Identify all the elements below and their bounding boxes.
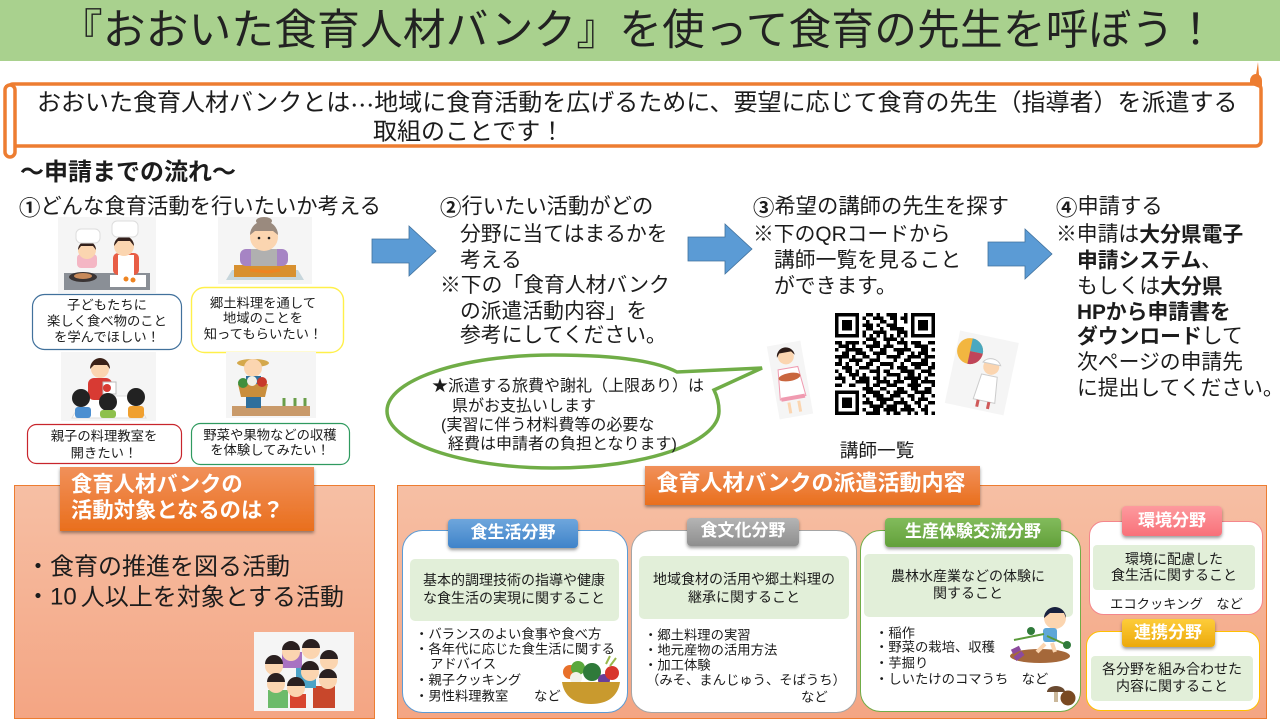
step 4 text: ※申請は大分県電子 xyxy=(1056,223,1243,246)
card: dietary life xyxy=(402,519,628,712)
illustration: nutritionist with food chart xyxy=(945,331,1019,415)
step 2 text: ②行いたい活動がどの xyxy=(440,191,653,222)
step 4 text: もしくは大分県 xyxy=(1077,275,1223,298)
step 3 text: ※下のQRコードから xyxy=(753,223,951,246)
description xyxy=(864,554,1073,617)
step 4 text xyxy=(1056,191,1280,400)
illustration: farmer with vegetables xyxy=(226,352,316,418)
eligibility list: ・10人以上を対象とする活動 xyxy=(26,583,344,610)
step 2 text: ※下の「食育人材バンク xyxy=(440,274,670,297)
tab: collaboration: 連携分野 xyxy=(1134,623,1202,642)
illustration: vegetable basket xyxy=(562,656,620,704)
activity list: ・バランスのよい食事や食べ方 xyxy=(415,627,601,642)
speech box: local cuisine: 知ってもらいたい！ xyxy=(204,326,322,342)
activity list: ・地元産物の活用方法 xyxy=(644,643,777,658)
title banner: 『おおいた食育人材バンク』を使って食育の先生を呼ぼう！ xyxy=(60,6,1217,54)
speech box: children learning xyxy=(32,294,182,350)
tab: environment xyxy=(1122,506,1222,536)
activity list: （みそ、まんじゅう、そばうち） xyxy=(646,673,846,688)
description: 関すること xyxy=(933,585,1003,601)
step 2 text: 分野に当てはまるかを xyxy=(460,223,668,246)
activity list: ・郷土料理の実習 xyxy=(644,628,751,643)
description: 農林水産業などの体験に xyxy=(891,568,1045,584)
step 1 heading: ①どんな食育活動を行いたいか考える xyxy=(19,191,381,222)
QR caption: 講師一覧 xyxy=(840,440,914,461)
step 4 text: 申請システム、 xyxy=(1077,249,1222,272)
activity list: ・野菜の栽培、収穫 xyxy=(875,640,995,655)
activity list: など xyxy=(801,690,828,705)
step 3 text: 講師一覧を見ること xyxy=(774,249,961,272)
activity list xyxy=(644,628,846,705)
step 3 text: ができます。 xyxy=(774,275,897,298)
callout bubble: travel and fees: 県がお支払いします xyxy=(452,397,596,415)
tab: dietary life: 食生活分野 xyxy=(470,523,556,542)
callout bubble: travel and fees xyxy=(387,355,762,468)
description xyxy=(1093,545,1255,590)
illustration: woman with dish xyxy=(767,341,813,419)
callout bubble: travel and fees: (実習に伴う材料費等の必要な xyxy=(441,416,654,434)
activity list: ・加工体験 xyxy=(644,658,711,673)
speech box: local cuisine: 地域のことを xyxy=(223,311,303,326)
heading: dispatch activities xyxy=(645,466,980,505)
callout bubble: travel and fees: 経費は申請者の負担となります) xyxy=(448,435,677,453)
arrow: step 3 to 4 xyxy=(988,229,1052,279)
example: エコクッキング など xyxy=(1110,597,1243,612)
step 4 text: HPから申請書を xyxy=(1077,301,1231,324)
QR code to instructor list xyxy=(835,313,935,415)
step 3 text: ③希望の講師の先生を探す xyxy=(753,191,1009,222)
speech box: parent child class: 親子の料理教室を xyxy=(51,429,157,444)
illustration: boy digging potatoes xyxy=(1010,607,1071,663)
description: 基本的調理技術の指導や健康 xyxy=(423,572,605,588)
tab: production experience xyxy=(885,518,1061,547)
tab: food culture xyxy=(687,518,799,546)
speech box: harvest experience: を体験してみたい！ xyxy=(210,443,330,458)
step 3 text xyxy=(753,191,1009,298)
activity list: など xyxy=(534,689,561,704)
tab: food culture: 食文化分野 xyxy=(700,521,786,540)
callout bubble: travel and fees: ★派遣する旅費や謝礼（上限あり）は xyxy=(432,377,704,395)
description: 環境に配慮した xyxy=(1125,551,1223,567)
activity list: ・男性料理教室 xyxy=(415,689,508,704)
illustration: grandmother cooking xyxy=(218,217,312,284)
heading: eligibility: 食育人材バンクの xyxy=(71,473,243,497)
description: 各分野を組み合わせた xyxy=(1102,661,1242,677)
card: environment xyxy=(1090,506,1262,614)
description: 内容に関すること xyxy=(1116,678,1228,694)
illustration: child and adult cooking xyxy=(58,217,156,293)
step 2 text xyxy=(440,191,670,347)
card: production experience xyxy=(860,518,1080,712)
activity list xyxy=(415,627,615,704)
description: な食生活の実現に関すること xyxy=(423,590,605,606)
step 4 text: 次ページの申請先 xyxy=(1077,351,1243,374)
tab: collaboration xyxy=(1122,619,1215,647)
step 2 text: 考える xyxy=(460,249,522,272)
activity list: ・芋掘り xyxy=(875,656,928,671)
description: 地域食材の活用や郷土料理の xyxy=(653,571,835,587)
speech box: children learning: 楽しく食べ物のこと xyxy=(47,314,167,329)
heading: flow until application: ～申請までの流れ～ xyxy=(20,151,236,186)
illustration: shiitake mushrooms xyxy=(1047,686,1076,706)
panel: activity eligibility xyxy=(14,467,374,718)
speech box: harvest experience: 野菜や果物などの収穫 xyxy=(203,428,337,443)
illustration: group of children xyxy=(254,632,354,711)
card: collaboration xyxy=(1086,619,1260,710)
heading: eligibility xyxy=(60,467,314,531)
tab: dietary life xyxy=(448,519,578,548)
illustration: teacher and children xyxy=(61,352,156,421)
arrow: step 2 to 3 xyxy=(688,224,752,274)
step 2 text: 参考にしてください。 xyxy=(460,324,667,347)
intro scroll callout xyxy=(5,62,1262,157)
speech box: harvest experience xyxy=(192,424,350,464)
step 4 text: に提出してください。 xyxy=(1077,377,1280,400)
card: food culture xyxy=(632,518,856,712)
eligibility list xyxy=(26,553,344,610)
speech box: children learning: 子どもたちに xyxy=(67,298,147,313)
heading: eligibility: 活動対象となるのは？ xyxy=(71,499,284,523)
eligibility list: ・食育の推進を図る活動 xyxy=(26,553,290,580)
tab: environment: 環境分野 xyxy=(1138,511,1206,530)
heading: dispatch activities: 食育人材バンクの派遣活動内容 xyxy=(656,470,966,495)
speech box: local cuisine xyxy=(192,288,344,352)
step 4 text: ダウンロードして xyxy=(1077,324,1243,348)
description xyxy=(639,556,849,619)
activity list: ・各年代に応じた食生活に関する xyxy=(415,642,615,657)
step 4 text: ④申請する xyxy=(1056,191,1163,222)
arrow: step 1 to 2 xyxy=(372,226,436,276)
panel: dispatch activities xyxy=(398,466,1266,718)
speech box: parent child class: 開きたい！ xyxy=(71,446,137,461)
description: 食生活に関すること xyxy=(1111,567,1237,583)
activity list xyxy=(875,626,1048,687)
step 2 text: の派遣活動内容」を xyxy=(460,300,647,323)
activity list: ・稲作 xyxy=(875,626,915,641)
speech box: parent child class xyxy=(28,424,182,464)
speech box: children learning: を学んでほしい！ xyxy=(54,330,160,345)
intro scroll callout: 取組のことです！ xyxy=(373,118,564,145)
description xyxy=(410,559,619,621)
activity list: ・しいたけのコマうち など xyxy=(875,672,1048,687)
tab: production experience: 生産体験交流分野 xyxy=(905,522,1041,541)
activity list: アドバイス xyxy=(430,657,496,672)
activity list: ・親子クッキング xyxy=(415,673,521,688)
description: 継承に関すること xyxy=(688,589,800,605)
intro scroll callout: おおいた食育人材バンクとは…地域に食育活動を広げるために、要望に応じて食育の先生（指導者）を派遣する xyxy=(37,85,1237,120)
speech box: local cuisine: 郷土料理を通して xyxy=(210,296,316,311)
description xyxy=(1091,656,1253,701)
